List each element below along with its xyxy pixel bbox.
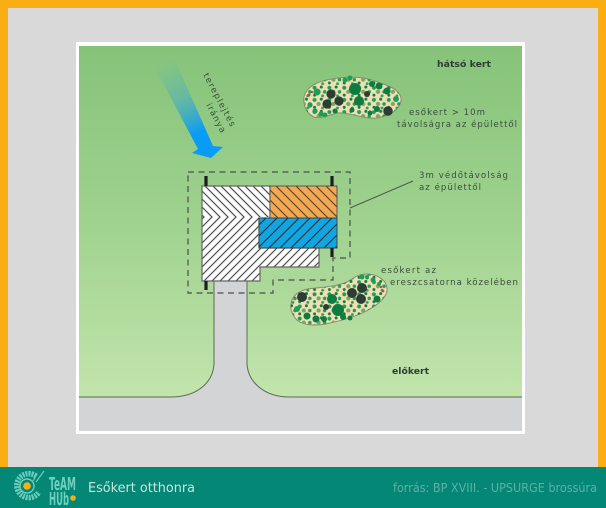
house: white wing	[202, 186, 319, 281]
3 m buffer dashed outline	[188, 172, 350, 293]
gutter downpipes	[206, 176, 332, 290]
footer title: Esőkert otthonra	[88, 480, 195, 496]
label: slope direction: tereplejtés	[200, 71, 238, 129]
lawn: back garden	[79, 46, 522, 397]
label: rain garden distance: távolságra az épülettől	[397, 119, 517, 130]
rain garden: far from house	[304, 76, 401, 118]
site plan	[79, 46, 522, 431]
rain garden: near gutter	[291, 274, 387, 325]
road	[79, 46, 522, 431]
label: 3 m buffer: az épülettől	[419, 182, 481, 193]
logo: Team Hub: TeAM	[49, 474, 76, 495]
road edges	[79, 281, 522, 397]
label: 3 m buffer: 3m védőtávolság	[419, 170, 508, 181]
footer band	[0, 467, 606, 508]
arrow: slope direction	[155, 60, 223, 158]
label: rain garden near gutter: ereszcsatorna közelében	[390, 277, 518, 288]
house: blue section	[259, 218, 337, 248]
logo: Team Hub	[17, 471, 76, 508]
label: rain garden distance	[397, 108, 517, 130]
label: rain garden near gutter: esőkert az	[381, 266, 436, 276]
label: rain garden near gutter	[381, 266, 518, 288]
label: 3 m buffer	[419, 170, 508, 193]
label: slope direction: iránya	[203, 102, 227, 135]
footer source: forrás: BP XVIII. - UPSURGE brossúra	[393, 481, 597, 495]
label: rain garden distance: esőkert > 10m	[409, 108, 485, 118]
label: front garden: előkert	[392, 367, 429, 377]
white frame	[76, 42, 525, 434]
label: back garden: hátsó kert	[437, 59, 491, 70]
house	[202, 186, 337, 281]
house: orange section	[270, 186, 337, 218]
leader line	[350, 181, 413, 208]
